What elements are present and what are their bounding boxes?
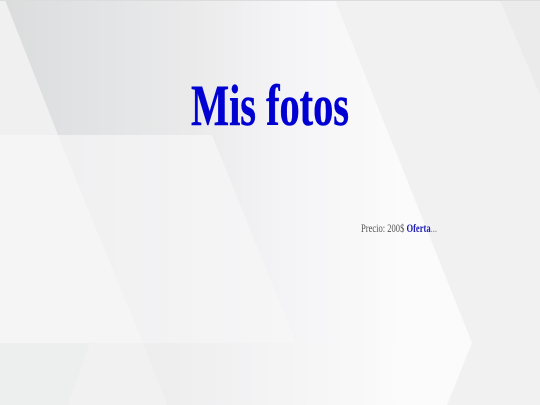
title: Mis fotos	[191, 73, 349, 138]
price line: Precio: 200$ Oferta...	[361, 221, 437, 235]
